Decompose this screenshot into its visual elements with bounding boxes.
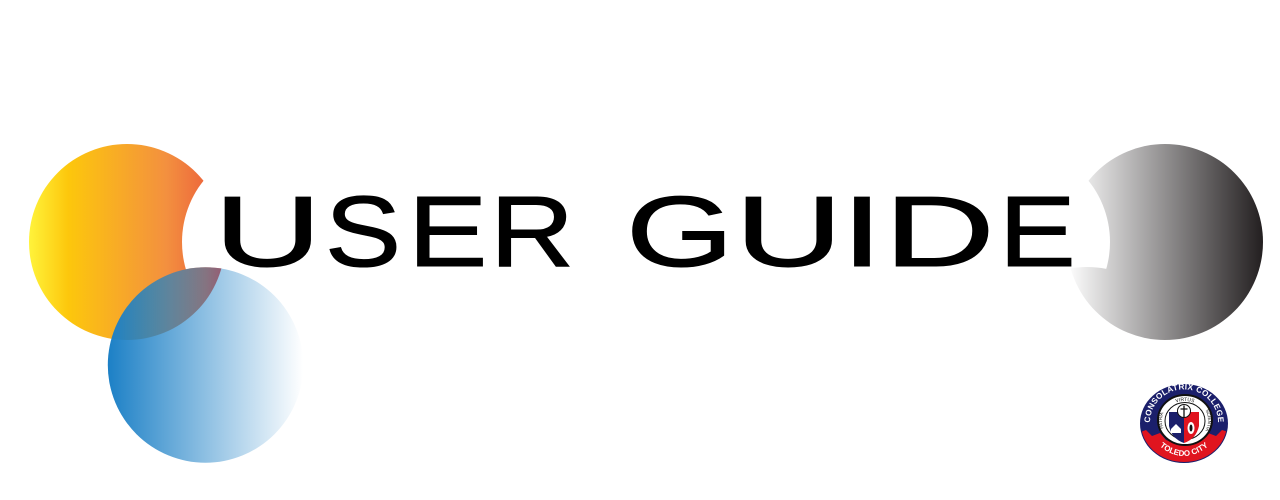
title: USER GUIDE: U [214,176,321,288]
logo: Consolatrix College seal: VIRTUS [1175,398,1194,402]
circle: blue fading to transparent [108,267,303,463]
title: USER GUIDE: E [999,176,1076,288]
title: USER GUIDE [214,176,1076,288]
title: USER GUIDE: G [626,176,734,288]
logo: Consolatrix College seal: SCIENTIA [1205,410,1211,431]
title: USER GUIDE: I [841,176,883,288]
title: USER GUIDE: E [408,176,487,288]
title: USER GUIDE: U [735,176,842,288]
logo: Consolatrix College seal [1140,384,1228,463]
logo: Consolatrix College seal: PATRIA [1159,412,1164,429]
title: USER GUIDE: S [325,176,401,288]
circle: yellow-orange with cut-out [29,144,222,340]
logo: Consolatrix College seal: TOLEDO CITY [1161,442,1207,456]
circle: grey gradient with cut-out [1074,144,1263,340]
title: USER GUIDE: R [490,176,574,288]
logo: Consolatrix College seal: CONSOLATRIX COLLEGE [1144,384,1224,422]
decorative circles and college seal [29,144,1263,463]
title: USER GUIDE: D [884,176,994,288]
